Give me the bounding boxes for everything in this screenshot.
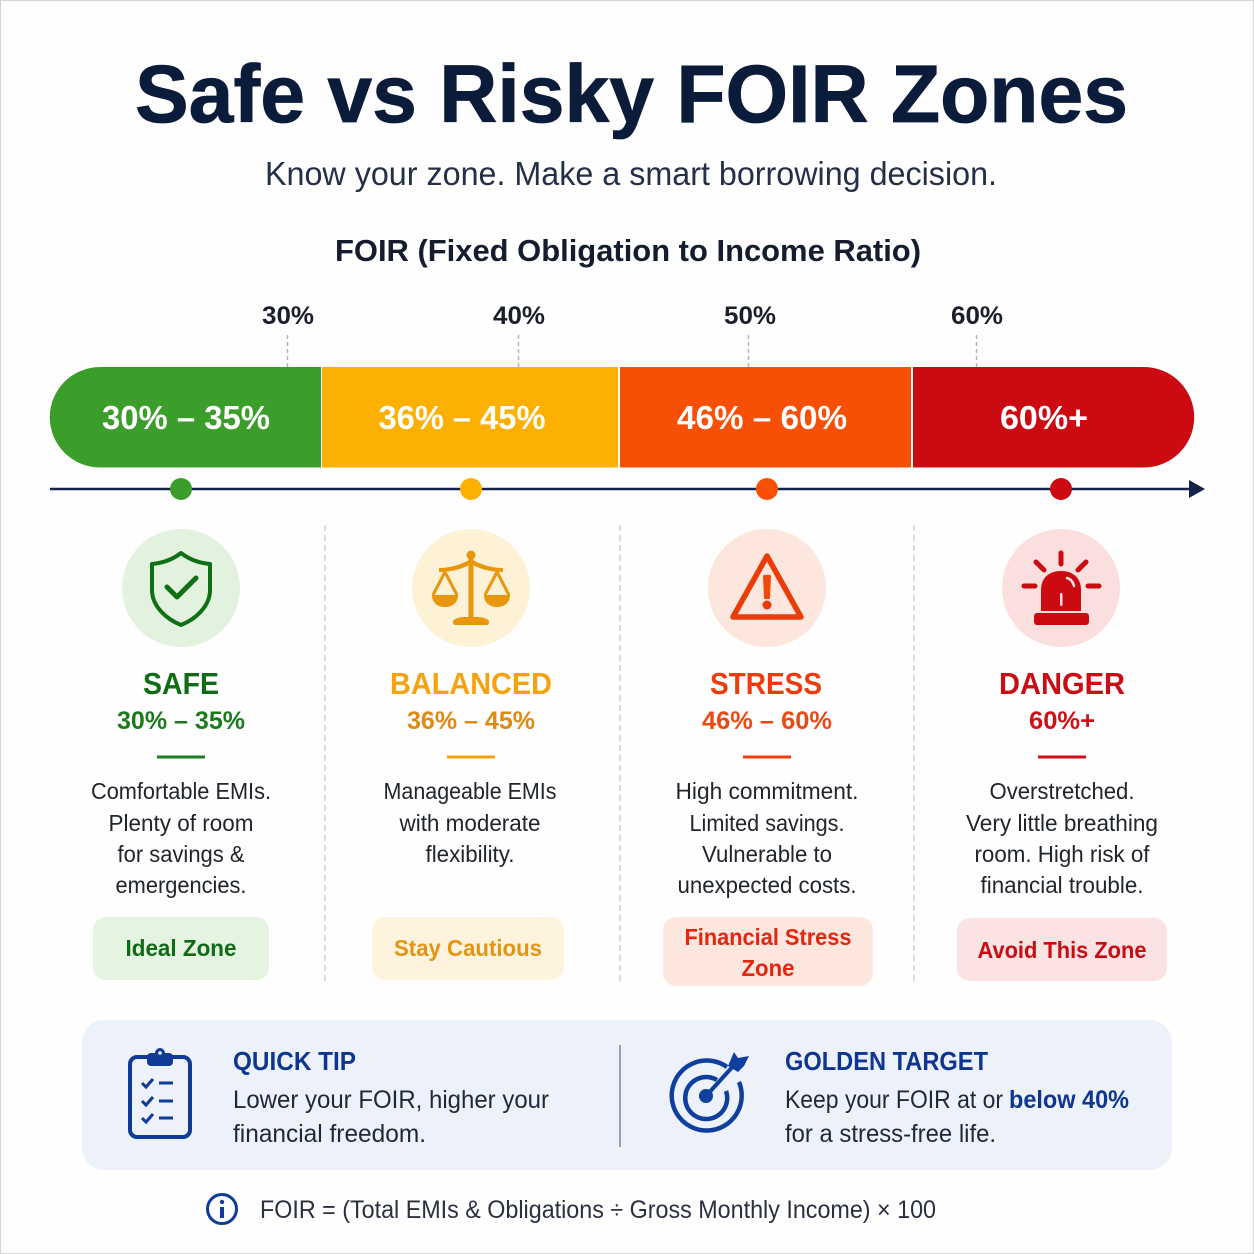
zone name: DANGER [999,666,1125,701]
description: Very little breathing [966,810,1158,836]
scale tick labels: 40% [493,302,545,330]
description: flexibility. [426,841,514,867]
title: Safe vs Risky FOIR Zones [135,49,1128,140]
badge: avoid this zone: Avoid This Zone [978,937,1146,963]
description: Comfortable EMIs. [91,778,271,804]
description [384,778,556,867]
panel: stress [663,529,873,986]
subtitle: Know your zone. Make a smart borrowing decision. [265,155,997,192]
FOIR range bar: 36% – 45% [378,399,546,436]
scale tick labels: 60% [951,302,1003,330]
FOIR range bar: 30% – 35% [102,399,270,436]
description: emergencies. [116,872,246,898]
zone name: SAFE [143,666,219,701]
description: for savings & [118,841,244,867]
description: High commitment. [676,778,858,804]
scale tick labels: 30% [262,302,314,330]
panel: safe [91,529,271,980]
badge: financial stress zone: Financial Stress [684,924,852,950]
badge: financial stress zone [663,917,873,986]
quick tip text: Lower your FOIR, higher your [233,1086,549,1114]
FOIR range bar: 60%+ [1000,399,1088,436]
description: unexpected costs. [678,872,856,898]
badge: stay cautious: Stay Cautious [394,935,542,961]
zone name: STRESS [710,666,822,701]
description: Overstretched. [990,778,1134,804]
zone range: 46% – 60% [702,707,832,735]
badge: stay cautious [372,917,564,980]
description [676,778,858,898]
description: Plenty of room [108,810,254,836]
golden target text: GOLDEN TARGET [785,1046,988,1076]
panel: danger [957,529,1167,981]
description: financial trouble. [980,872,1144,898]
description [966,778,1158,898]
golden target text: Keep your FOIR at or [785,1086,1003,1114]
golden target text: for a stress-free life. [785,1120,996,1148]
quick tip text: financial freedom. [233,1120,426,1148]
badge: ideal zone: Ideal Zone [126,935,236,961]
quick tip text [233,1046,549,1148]
FOIR range bar: 46% – 60% [677,399,847,436]
scale tick labels [262,302,1003,367]
FOIR range bar [50,367,1194,468]
zone range: 60%+ [1029,707,1095,735]
panel: balanced [372,529,564,980]
icon: balance scales [412,529,530,647]
formula: FOIR = (Total EMIs & Obligations ÷ Gross Monthly Income) × 100 [260,1196,936,1224]
description: Vulnerable to [702,841,832,867]
description [91,778,271,898]
icon: siren [1002,529,1120,647]
zone range: 36% – 45% [407,707,535,735]
icon: warning triangle [708,529,826,647]
badge: financial stress zone: Zone [742,955,794,981]
panel: tips [82,1020,1172,1170]
description: with moderate [399,810,540,836]
description: Limited savings. [690,810,844,836]
axis arrow with zone markers [50,478,1205,500]
description: room. High risk of [974,841,1150,867]
quick tip text: QUICK TIP [233,1046,356,1076]
description: Manageable EMIs [384,778,556,804]
scale tick labels: 50% [724,302,776,330]
icon: shield with check [122,529,240,647]
icon: info [208,1194,236,1224]
zone name: BALANCED [390,666,552,701]
icon: clipboard checklist [130,1048,190,1137]
golden target text [785,1046,1129,1148]
icon: target with arrow [672,1052,749,1131]
scale heading: FOIR (Fixed Obligation to Income Ratio) [335,233,921,268]
badge: avoid this zone [957,918,1167,981]
badge: ideal zone [93,917,269,980]
zone range: 30% – 35% [117,707,245,735]
golden target text: below 40% [1009,1086,1129,1114]
